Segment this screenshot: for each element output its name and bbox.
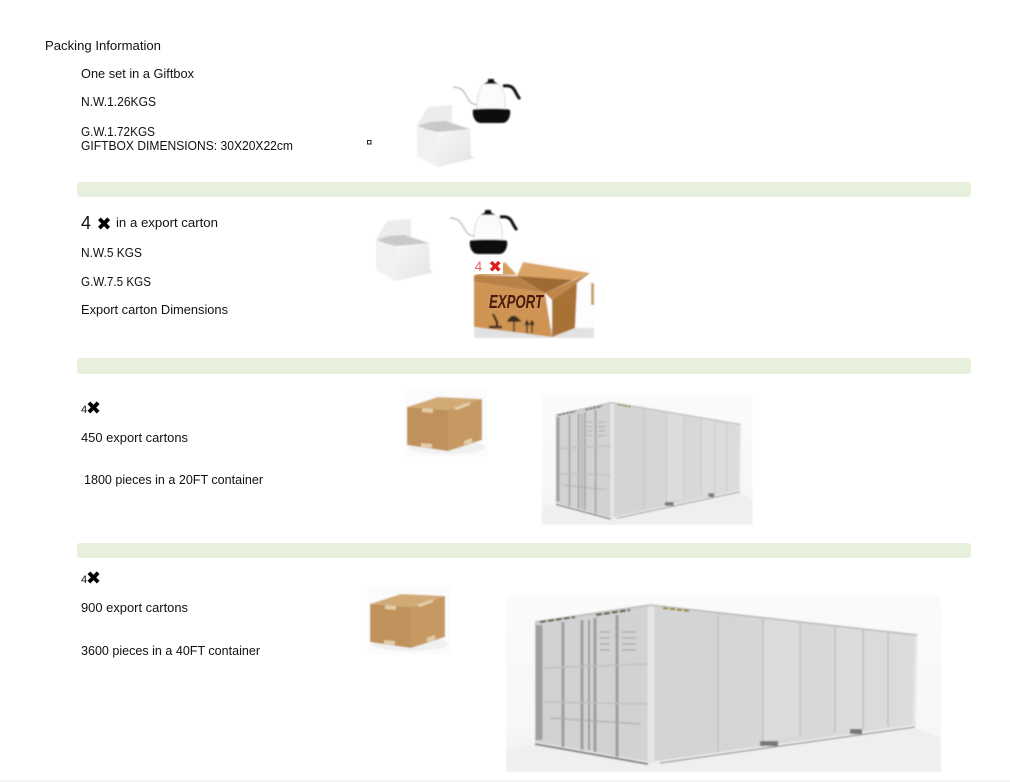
text block: giftbox details: GIFTBOX DIMENSIONS: 30X20X22cm [81,138,293,153]
icon: 20FT container [542,396,752,525]
text block: 20FT details: 450 export cartons [81,430,188,445]
label: EXPORT: EXPORT [489,292,544,312]
text block: export carton details: ✖ [96,214,112,235]
text block: giftbox details: One set in a Giftbox [81,66,194,81]
text block: 20FT details [81,398,264,487]
icon: kettle [453,79,520,123]
text block: 20FT details: 4 [81,404,87,416]
text block: giftbox details: G.W.1.72KGS [81,124,155,139]
label: red four times: 4 [474,258,482,274]
text block: 20FT details: ✖ [86,398,101,419]
panel: 40FT container packing [81,568,941,772]
text block: 40FT details: 4 [81,574,87,586]
divider bar 2 [77,358,971,374]
icon: kettle [450,210,517,254]
text block: export carton details: Export carton Dimensions [81,302,228,317]
text block: giftbox details [81,66,293,153]
icon: cardboard carton [368,587,450,654]
icon: open export carton [474,257,594,338]
panel: giftbox packing [81,66,520,167]
text block: 20FT details: 1800 pieces in a 20FT container [84,472,264,487]
icon: small square marker [368,140,371,144]
label: red four times: ✖ [488,257,502,276]
text block: export carton details: 4 [81,213,91,233]
text block: export carton details [81,213,228,317]
panel: export carton packing [81,210,594,338]
text block: 40FT details: 3600 pieces in a 40FT container [81,643,261,658]
text block: export carton details: N.W.5 KGS [81,245,142,260]
text block: giftbox details: N.W.1.26KGS [81,94,156,109]
text block: 40FT details: 900 export cartons [81,600,188,615]
icon: open white giftbox [417,105,475,167]
text block: 40FT details: ✖ [86,568,101,589]
label: red four times [474,257,503,276]
icon: 40FT container [506,596,941,772]
divider bar 3 [77,543,971,558]
text block: export carton details: G.W.7.5 KGS [81,274,151,289]
title: Packing Information [45,38,161,53]
icon: open white giftbox [376,219,434,281]
divider bar 1 [77,182,971,197]
text block: 40FT details [81,568,261,658]
panel: 20FT container packing [81,390,752,525]
text block: export carton details: in a export carton [116,215,218,230]
icon: cardboard carton [405,390,487,457]
